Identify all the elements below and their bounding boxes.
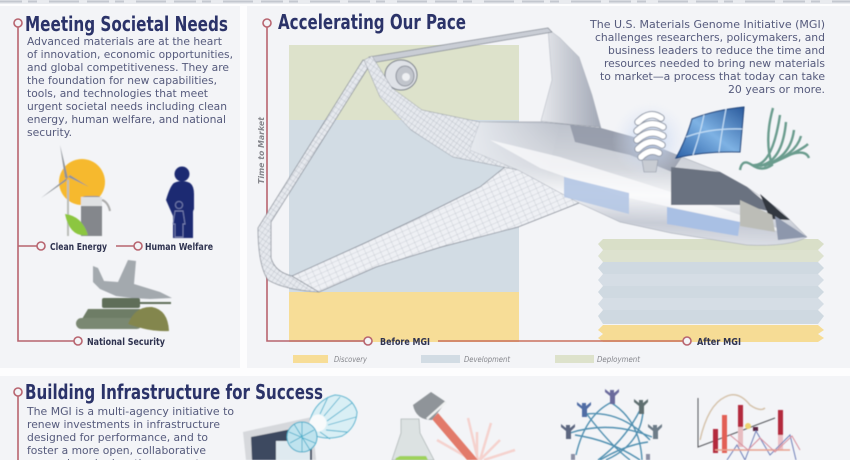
illustration: aircraft xyxy=(258,28,807,292)
text block: the foundation for new capabilities, xyxy=(27,75,217,87)
text block xyxy=(26,406,234,460)
label: Before MGI: Before MGI xyxy=(380,337,430,348)
text block: renew investments in infrastructure xyxy=(27,419,220,431)
text block: Advanced materials are at the heart xyxy=(27,36,222,48)
text block: of innovation, economic opportunities, xyxy=(27,49,233,61)
legend: Development xyxy=(464,355,511,364)
heading: Building Infrastructure for Success xyxy=(25,380,323,404)
fuselage xyxy=(470,122,807,245)
icon: data charts xyxy=(698,395,800,460)
engine xyxy=(385,60,417,90)
text block: and global competitiveness. They are xyxy=(27,62,229,74)
label: After MGI: After MGI xyxy=(697,337,741,348)
main wing xyxy=(292,167,579,292)
legend xyxy=(293,355,641,364)
icon: clean energy xyxy=(41,145,110,236)
legend: Discovery xyxy=(334,355,367,364)
text block: foster a more open, collaborative xyxy=(27,445,206,457)
panel: Accelerating Our Pace xyxy=(247,6,850,368)
timeline connector xyxy=(14,388,22,460)
panel: Building Infrastructure for Success xyxy=(0,376,850,460)
axes xyxy=(263,19,691,345)
panel: Meeting Societal Needs xyxy=(0,6,240,368)
fuselage tail fade into mesh xyxy=(470,122,560,184)
icon: light bulb xyxy=(612,102,688,178)
timeline connector xyxy=(14,19,142,345)
icon: material strands xyxy=(740,108,809,170)
icon: human welfare xyxy=(166,166,194,238)
icon: computing monitor and spiral xyxy=(243,395,357,460)
text block: MGI intro: resources needed to bring new materials xyxy=(604,58,825,70)
highlight xyxy=(490,140,800,236)
icon: flask and laser xyxy=(392,392,515,460)
heading: Accelerating Our Pace xyxy=(278,10,466,34)
text block: The MGI is a multi-agency initiative to xyxy=(26,406,234,418)
text block xyxy=(27,36,233,139)
decorative top strip xyxy=(0,0,850,4)
icon: collaboration network xyxy=(561,389,662,460)
text block: MGI intro: business leaders to reduce the time and xyxy=(608,45,825,57)
text block: MGI intro: to market—a process that today can take xyxy=(600,71,825,83)
icon: solar panel xyxy=(676,107,744,158)
label: Human Welfare: Human Welfare xyxy=(145,242,213,253)
text block: MGI intro: The U.S. Materials Genome Initiative (MGI) xyxy=(589,19,825,31)
dark upper panel xyxy=(570,125,682,172)
text block: MGI intro xyxy=(589,19,825,96)
text block: urgent societal needs including clean xyxy=(27,101,227,113)
legend: Deployment xyxy=(597,355,641,364)
label: Clean Energy: Clean Energy xyxy=(50,242,108,253)
text block: tools, and technologies that meet xyxy=(27,88,208,100)
rear body xyxy=(364,56,600,190)
text block: MGI intro: challenges researchers, policymakers, and xyxy=(595,32,825,44)
top strut xyxy=(369,28,552,63)
heading: Meeting Societal Needs xyxy=(25,12,228,36)
left strut and winglet xyxy=(258,60,371,292)
text block: MGI intro: 20 years or more. xyxy=(728,84,825,96)
label: National Security: National Security xyxy=(87,337,166,348)
text block: energy, human welfare, and national xyxy=(27,114,226,126)
bar: before MGI stack xyxy=(289,45,519,342)
icon: national security xyxy=(76,260,172,331)
cockpit window xyxy=(671,167,778,213)
text block: security. xyxy=(27,127,72,139)
vertical fin xyxy=(541,29,601,128)
axis label: Time to Market: Time to Market xyxy=(257,116,266,184)
bar: after MGI stack xyxy=(598,239,824,342)
text block: designed for performance, and to xyxy=(27,432,208,444)
